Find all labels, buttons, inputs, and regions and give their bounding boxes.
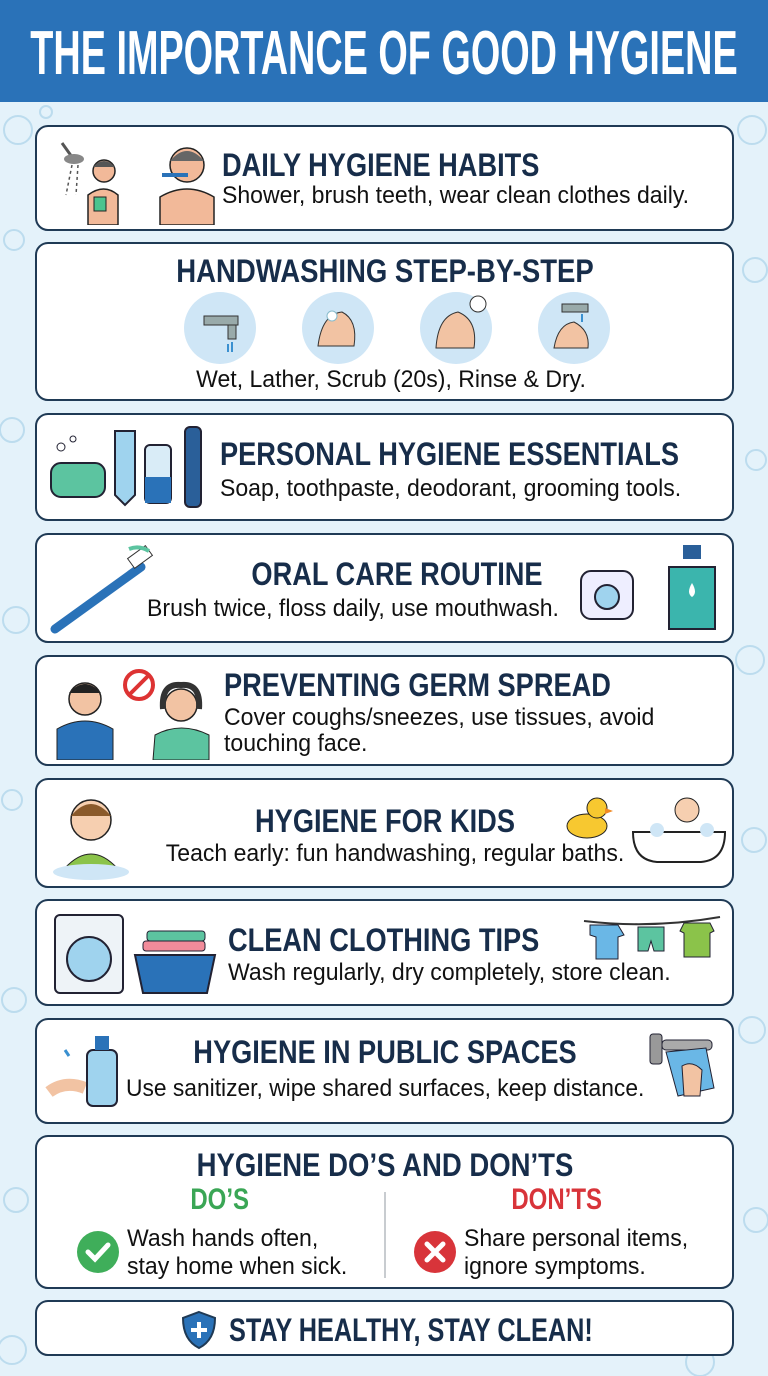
icon: floss and mouthwash bbox=[580, 545, 716, 630]
panel: footer slogan bbox=[35, 1300, 734, 1356]
icon: shower and brushing bbox=[60, 142, 215, 225]
heading: HANDWASHING STEP-BY-STEP bbox=[176, 253, 593, 289]
panel: oral care bbox=[35, 533, 734, 643]
do's text bbox=[127, 1225, 347, 1280]
panel: preventing germ spread bbox=[35, 655, 734, 766]
heading: HYGIENE IN PUBLIC SPACES bbox=[193, 1034, 576, 1070]
don'ts heading: DON’TS bbox=[512, 1183, 602, 1216]
icons: four steps bbox=[184, 292, 610, 364]
description: Brush twice, floss daily, use mouthwash. bbox=[147, 595, 558, 622]
do's text: stay home when sick. bbox=[127, 1253, 347, 1280]
heading: DAILY HYGIENE HABITS bbox=[222, 147, 539, 183]
description: Cover coughs/sneezes, use tissues, avoid bbox=[224, 704, 654, 731]
heading: HYGIENE FOR KIDS bbox=[255, 803, 514, 839]
panel: daily hygiene habits bbox=[35, 125, 734, 231]
panel: handwashing bbox=[35, 242, 734, 401]
icon: child washing hands bbox=[53, 799, 129, 880]
icon: coughing people bbox=[56, 669, 210, 760]
icon: duck and bathtub bbox=[566, 798, 726, 863]
heading: PREVENTING GERM SPREAD bbox=[224, 667, 611, 703]
icon: shield bbox=[182, 1310, 216, 1350]
description: touching face. bbox=[224, 730, 367, 757]
do's column bbox=[77, 1183, 347, 1280]
icon: clothesline bbox=[584, 916, 720, 960]
header bar bbox=[0, 0, 768, 102]
panel: do's and don'ts bbox=[35, 1135, 734, 1289]
icon: toothbrush bbox=[50, 545, 153, 634]
heading: PERSONAL HYGIENE ESSENTIALS bbox=[220, 436, 679, 472]
heading: ORAL CARE ROUTINE bbox=[251, 556, 542, 592]
description: Wet, Lather, Scrub (20s), Rinse & Dry. bbox=[196, 366, 585, 393]
do's text: Wash hands often, bbox=[127, 1225, 318, 1252]
don'ts column bbox=[414, 1183, 688, 1280]
do's heading: DO’S bbox=[191, 1183, 249, 1216]
icon: washing machine and basket bbox=[54, 914, 216, 994]
description bbox=[224, 704, 654, 757]
heading: HYGIENE DO’S AND DON’TS bbox=[196, 1147, 573, 1183]
description: Wash regularly, dry completely, store clean. bbox=[228, 959, 671, 986]
icon: wiping handle bbox=[650, 1034, 715, 1097]
icons: soap toothpaste deodorant comb bbox=[50, 426, 202, 508]
icon: check bbox=[77, 1231, 119, 1273]
don'ts text: ignore symptoms. bbox=[464, 1253, 646, 1280]
slogan: STAY HEALTHY, STAY CLEAN! bbox=[229, 1312, 593, 1348]
panel: public spaces bbox=[35, 1018, 734, 1124]
description: Shower, brush teeth, wear clean clothes daily. bbox=[222, 182, 689, 209]
panel: personal hygiene essentials bbox=[35, 413, 734, 521]
description: Soap, toothpaste, deodorant, grooming tools. bbox=[220, 475, 681, 502]
panel: hygiene for kids bbox=[35, 778, 734, 888]
description: Use sanitizer, wipe shared surfaces, keep distance. bbox=[126, 1075, 644, 1102]
title: THE IMPORTANCE OF GOOD HYGIENE bbox=[30, 19, 738, 88]
description: Teach early: fun handwashing, regular baths. bbox=[165, 840, 624, 867]
heading: CLEAN CLOTHING TIPS bbox=[228, 922, 539, 958]
panel: clean clothing bbox=[35, 899, 734, 1006]
icon: cross bbox=[414, 1231, 456, 1273]
icon: sanitizer bbox=[46, 1036, 118, 1107]
don'ts text bbox=[464, 1225, 688, 1280]
don'ts text: Share personal items, bbox=[464, 1225, 688, 1252]
